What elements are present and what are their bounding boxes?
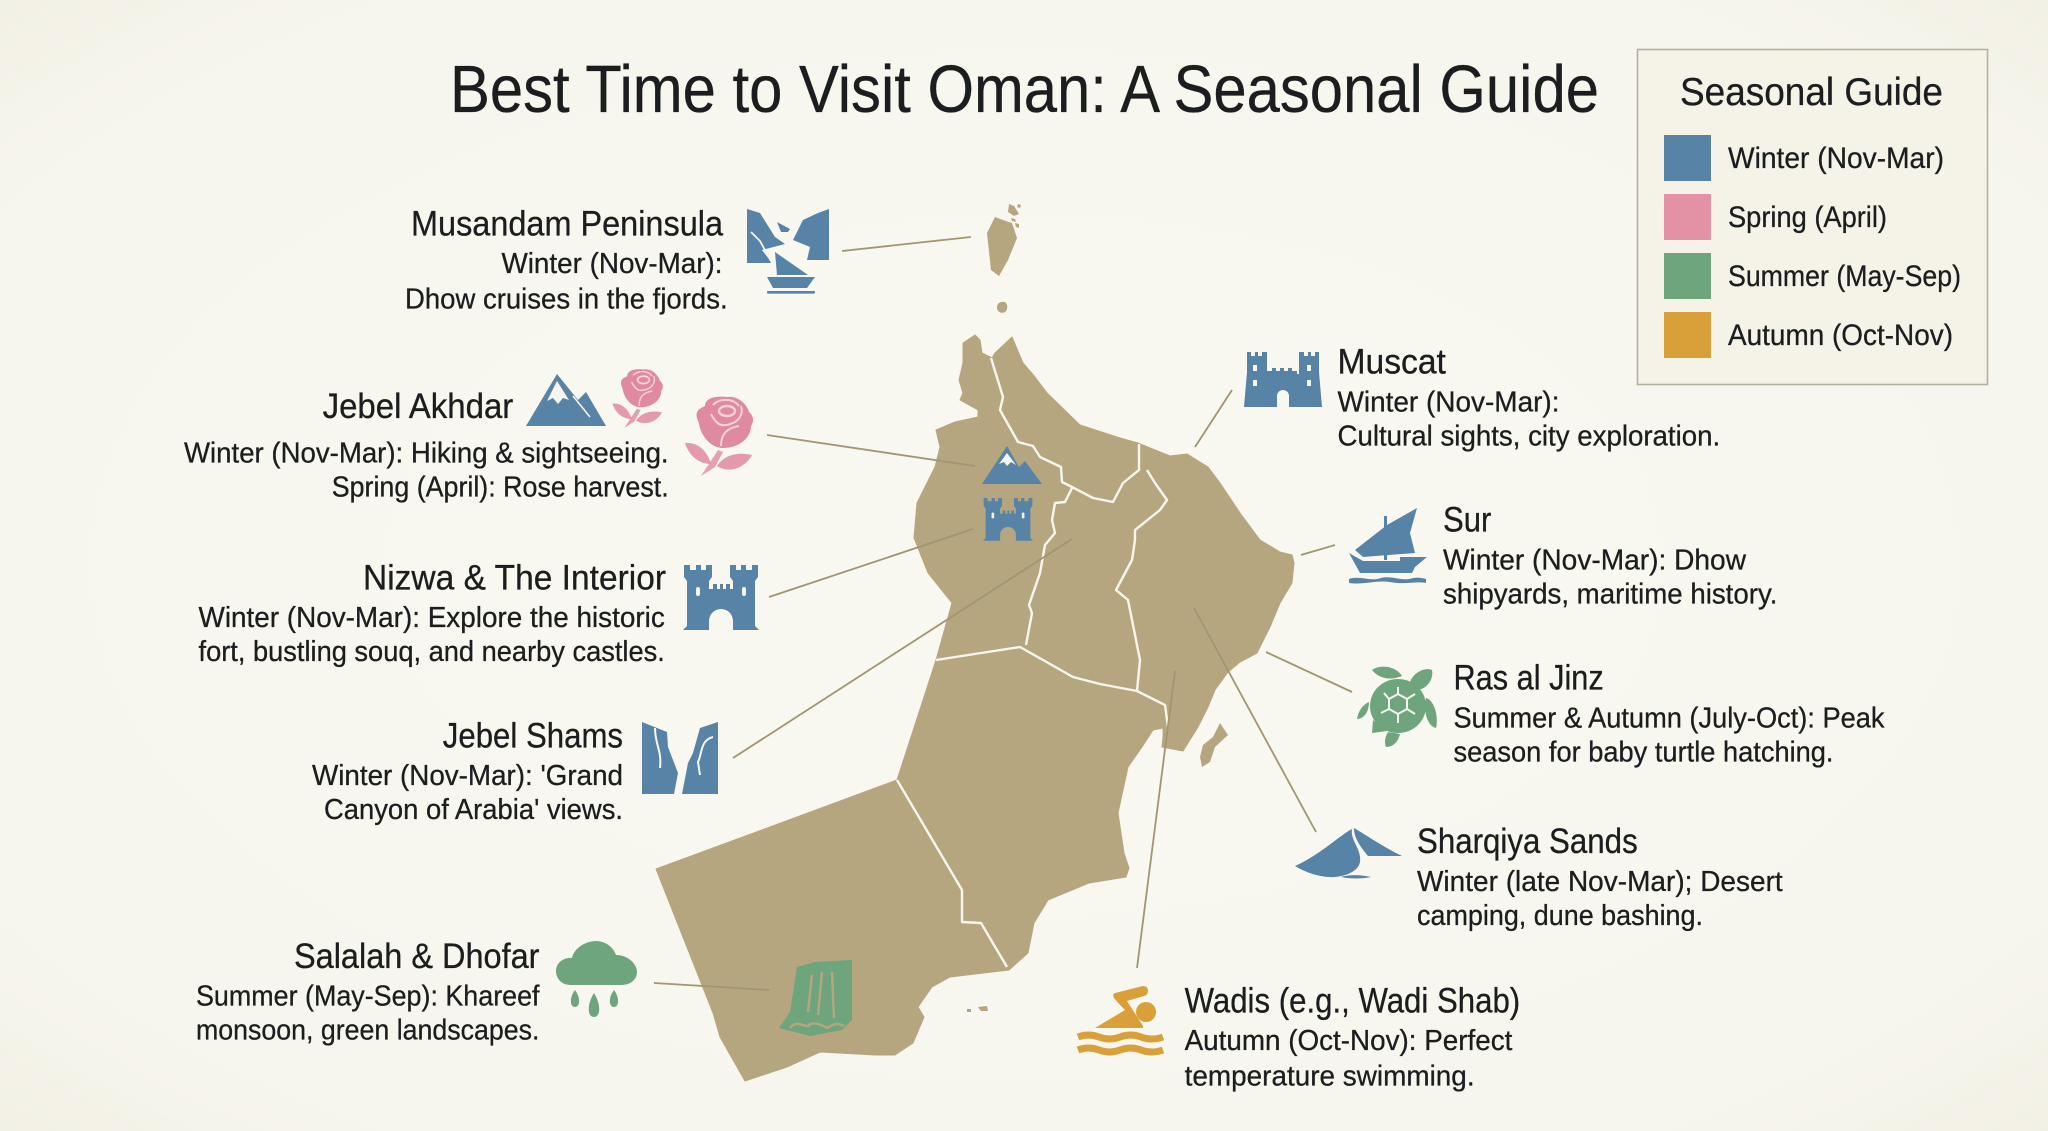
icon: castle bbox=[1244, 352, 1322, 407]
icon: large rose bbox=[685, 397, 753, 476]
icon: map waterfall bbox=[779, 960, 852, 1036]
description bbox=[405, 248, 728, 316]
description: Winter (Nov-Mar): Dhow bbox=[1443, 544, 1746, 576]
location: Nizwa & The Interior bbox=[198, 558, 759, 668]
heading: Ras al Jinz bbox=[1454, 658, 1604, 698]
description: Canyon of Arabia' views. bbox=[324, 794, 623, 826]
description: Summer & Autumn (July-Oct): Peak bbox=[1454, 702, 1885, 734]
description: Winter (late Nov-Mar); Desert bbox=[1417, 866, 1783, 898]
description: camping, dune bashing. bbox=[1417, 900, 1703, 932]
heading: Salalah & Dhofar bbox=[294, 937, 540, 976]
description: Winter (Nov-Mar): bbox=[502, 248, 722, 280]
description bbox=[196, 980, 540, 1046]
icon: swimmer bbox=[1078, 986, 1163, 1052]
icon: fort bbox=[683, 565, 759, 630]
legend swatch: autumn bbox=[1664, 312, 1711, 358]
map of Oman bbox=[656, 204, 1294, 1081]
location: Ras al Jinz bbox=[1357, 658, 1885, 768]
map: mainland bbox=[656, 335, 1294, 1081]
legend label: winter: Winter (Nov-Mar) bbox=[1728, 142, 1944, 175]
icon: dune bbox=[1295, 828, 1402, 878]
map: region boundaries bbox=[936, 358, 1168, 727]
legend label: spring: Spring (April) bbox=[1728, 201, 1887, 234]
description: Summer (May-Sep): Khareef bbox=[196, 980, 540, 1012]
leader lines bbox=[654, 237, 1352, 990]
location: Muscat bbox=[1244, 342, 1720, 452]
icon: map mountain bbox=[982, 446, 1042, 484]
icon: map fort bbox=[983, 498, 1033, 541]
description: shipyards, maritime history. bbox=[1443, 578, 1777, 610]
icon: rain cloud bbox=[556, 941, 637, 1017]
description: season for baby turtle hatching. bbox=[1454, 736, 1834, 768]
description bbox=[1417, 866, 1783, 932]
description: monsoon, green landscapes. bbox=[196, 1014, 540, 1046]
description: Winter (Nov-Mar): bbox=[1338, 386, 1560, 418]
legend swatch: summer bbox=[1664, 253, 1711, 299]
icon: mountain bbox=[526, 374, 606, 426]
location: Sur bbox=[1349, 500, 1777, 610]
map: western boundary bbox=[897, 780, 1007, 967]
location: Jebel Akhdar bbox=[184, 369, 753, 504]
map: small northern islets bbox=[997, 204, 1021, 313]
heading: Muscat bbox=[1338, 342, 1446, 382]
description bbox=[312, 760, 623, 826]
heading: Jebel Akhdar bbox=[323, 387, 514, 426]
legend heading: Seasonal Guide bbox=[1680, 71, 1943, 114]
description: Spring (April): Rose harvest. bbox=[332, 472, 669, 504]
map: Kuria Muria islands bbox=[967, 1006, 988, 1012]
description: Cultural sights, city exploration. bbox=[1338, 420, 1720, 452]
heading: Sharqiya Sands bbox=[1417, 822, 1638, 861]
heading: Jebel Shams bbox=[443, 716, 623, 756]
location: Musandam Peninsula bbox=[405, 204, 829, 316]
legend panel: Seasonal Guide bbox=[1638, 50, 1988, 384]
description bbox=[198, 602, 665, 668]
heading: Musandam Peninsula bbox=[411, 204, 723, 244]
heading: Wadis (e.g., Wadi Shab) bbox=[1185, 982, 1520, 1020]
location: Jebel Shams bbox=[312, 716, 718, 826]
location: Wadis bbox=[1078, 982, 1520, 1092]
description: Winter (Nov-Mar): Explore the historic bbox=[198, 602, 665, 634]
location: Salalah & Dhofar bbox=[196, 937, 637, 1046]
legend swatch: spring bbox=[1664, 194, 1711, 240]
map: Musandam exclave bbox=[987, 217, 1017, 276]
legend swatch: winter bbox=[1664, 135, 1711, 181]
location: Sharqiya Sands bbox=[1295, 822, 1783, 932]
description: Autumn (Oct-Nov): Perfect bbox=[1185, 1025, 1512, 1057]
legend label: autumn: Autumn (Oct-Nov) bbox=[1728, 319, 1953, 352]
legend frame bbox=[1638, 50, 1988, 384]
heading: Sur bbox=[1443, 500, 1492, 540]
map: Masirah island bbox=[1200, 723, 1228, 767]
icon: turtle bbox=[1357, 667, 1437, 747]
description: temperature swimming. bbox=[1185, 1060, 1475, 1092]
description: Winter (Nov-Mar): 'Grand bbox=[312, 760, 623, 792]
description bbox=[184, 438, 669, 504]
icon: small rose bbox=[612, 369, 663, 428]
description: fort, bustling souq, and nearby castles. bbox=[198, 636, 665, 668]
description: Winter (Nov-Mar): Hiking & sightseeing. bbox=[184, 438, 669, 470]
description bbox=[1454, 702, 1885, 768]
icon: fjord and dhow bbox=[747, 209, 829, 294]
description: Dhow cruises in the fjords. bbox=[405, 284, 728, 316]
description bbox=[1443, 544, 1777, 610]
icon: dhow bbox=[1349, 508, 1427, 583]
heading: Nizwa & The Interior bbox=[363, 558, 666, 598]
icon: canyon bbox=[642, 722, 718, 794]
description bbox=[1338, 386, 1720, 452]
title: Best Time to Visit Oman: A Seasonal Guide bbox=[450, 52, 1599, 127]
legend label: summer: Summer (May-Sep) bbox=[1728, 260, 1961, 293]
description bbox=[1185, 1025, 1512, 1092]
